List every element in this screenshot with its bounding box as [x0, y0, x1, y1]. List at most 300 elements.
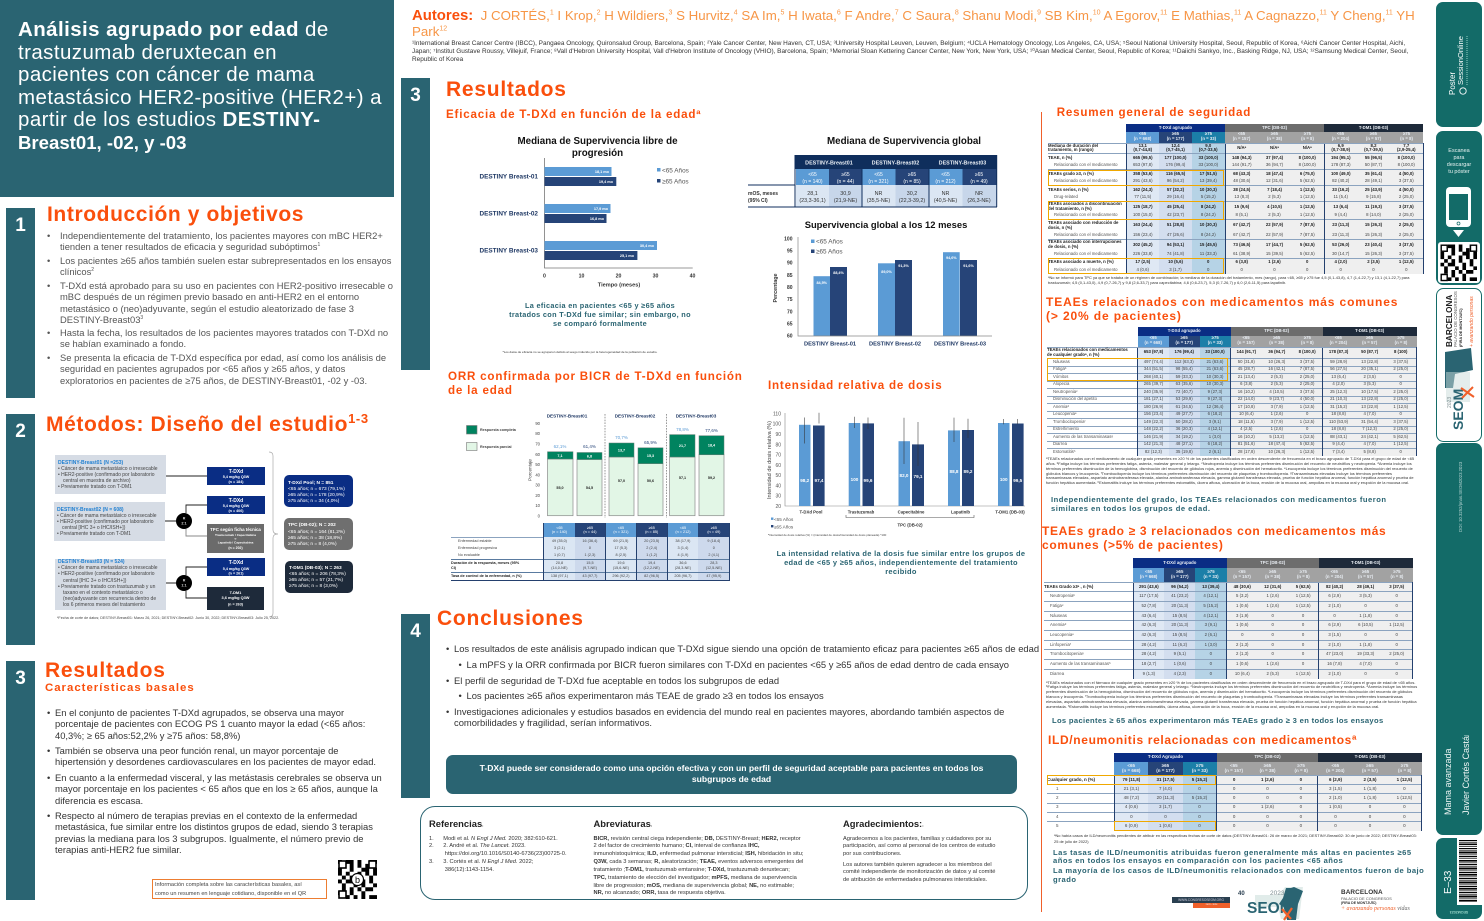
- table: resumen general de seguridad: 1 (12,5): [1300, 187, 1315, 192]
- patient box: DESTINY-Breast01: [55, 455, 166, 494]
- table: resumen general de seguridad: ≥75: [1205, 131, 1212, 136]
- table: resumen general de seguridad: TEAEs asociado con reducción de: [1048, 220, 1118, 225]
- table: resumen general de seguridad: 5 (62,5): [1300, 251, 1315, 256]
- table: TEAEs relacionados más comunes: 148 (22,2): [1144, 426, 1163, 431]
- table: resumen general de seguridad: 33 (16,2): [1332, 187, 1349, 192]
- table: TEAEs relacionados más comunes: 24 (42,1): [1361, 434, 1378, 439]
- table: TEAEs relacionados más comunes: 18 (8,8): [1331, 411, 1346, 416]
- table: mediana de SG: (35,5-NE): [867, 198, 890, 204]
- table: TEAEs relacionados más comunes: ≥65: [1181, 335, 1188, 340]
- header: poster title: Análisis agrupado por edad de: [18, 18, 329, 41]
- table: ILD neumonitis: 0: [1233, 786, 1235, 791]
- table: TEAEs relacionados más comunes: 240 (35,9): [1144, 389, 1163, 394]
- table: TEAEs relacionados más comunes: 9 (27,3): [1208, 389, 1222, 394]
- table: resumen general de seguridad: 47 (26,6): [1167, 232, 1184, 237]
- table: TEAEs relacionados más comunes: 5 (62,5): [1393, 434, 1408, 439]
- table: TEAEs relacionados más comunes: 10 (26,3): [1268, 359, 1285, 364]
- table: resumen general de seguridad: 28 (49,1): [1365, 178, 1382, 183]
- stacked bar chart: ORR: 54,5: [586, 486, 593, 490]
- takeaway: intensidad de dosis similar: La intensidad relativa de la dosis fue similar entre los grupos de: [777, 548, 1025, 558]
- table: ORR detail: 49 (35,0): [552, 539, 567, 543]
- table: TEAEs relacionados más comunes: <65: [1150, 335, 1157, 340]
- table: resumen general de seguridad: 2 (5,3): [1268, 212, 1281, 217]
- highlight: náuseas fatiga vómitos: [1047, 358, 1228, 381]
- highlight: cualquier grado: [1047, 775, 1216, 785]
- footnote: eficacia: ᵃLos datos de eficacia no se agruparon debido al sesgo inducido por la heterogeneidad de la población de estudio.: [503, 350, 657, 354]
- table: TEAEs relacionados más comunes: 16 (10,2): [1238, 434, 1255, 439]
- sidebar text: escanea para descargar: para: [1453, 155, 1464, 161]
- table: TEAEs relacionados más comunes: 3 (7,9): [1271, 419, 1283, 424]
- table: TEAEs relacionados más comunes: 7 (87,5): [1300, 366, 1314, 371]
- takeaway: eficacia similar: [509, 301, 691, 328]
- table: ORR detail: (n = 140): [552, 530, 567, 534]
- table: ILD neumonitis: 0: [1300, 814, 1302, 819]
- bar chart: mediana SLP: 18,1 mo: [595, 170, 610, 174]
- table: TEAEs relacionados más comunes: 10 (6,4): [1239, 411, 1254, 416]
- table: resumen general de seguridad: 2 (25,0): [1399, 222, 1414, 227]
- subheading: TEAEs más comunes: (> 20% de pacientes): [1046, 309, 1182, 323]
- table: TEAEs relacionados más comunes: 0: [1400, 411, 1402, 416]
- table: resumen general de seguridad: (0,7-33,5): [1199, 147, 1218, 152]
- table: TEAEs relacionados más comunes: 8 (100,0): [1299, 349, 1316, 354]
- table: TEAEs relacionados más comunes: 142 (21,3): [1144, 441, 1163, 446]
- table: ORR detail: (n = 49): [707, 530, 720, 534]
- table: TEAEs grado 3: 0: [1396, 642, 1398, 647]
- table: ILD neumonitis: 6 (2,9): [1329, 777, 1342, 782]
- table: resumen general de seguridad: 42 (23,7): [1167, 212, 1184, 217]
- table: resumen general de seguridad: 7 (87,5): [1300, 222, 1315, 227]
- bar chart: intensidad relativa de dosis: 80: [775, 442, 781, 448]
- text block: conclusiones bullets: Los pacientes ≥65 años experimentaron más TEAE de grado ≥3 en todos los ensayos: [466, 690, 824, 701]
- table: resumen general de seguridad: 177 (100,0): [1164, 155, 1186, 160]
- table: resumen general de seguridad: 8,2: [1370, 142, 1376, 148]
- bar chart: SG a 12 meses: <65 Años: [816, 238, 843, 246]
- table: TEAEs relacionados más comunes: 0: [1400, 374, 1402, 379]
- bar chart: SG a 12 meses: ≥65 Años: [816, 248, 843, 256]
- table: resumen general de seguridad: 50 (87,7): [1365, 162, 1382, 167]
- table: TEAEs relacionados más comunes: de cualquier gradoᵃ, n (%): [1047, 352, 1099, 357]
- table: TEAEs grado 3: 1 (2,6): [1266, 603, 1279, 608]
- text block: conclusiones bullets: Investigaciones adicionales y estudios basados en evidencia del mundo real en pacientes mayores, abordando también aspectos de: [454, 706, 1004, 717]
- table: ORR detail: ≥65: [711, 526, 717, 530]
- table: resumen general de seguridad: 2 (5,3): [1268, 194, 1281, 199]
- table: TEAEs grado 3: ≥65: [1269, 569, 1276, 574]
- abbreviations text: TPC, tratamiento de elección del investigador; mPFS, mediana de supervivencia: [594, 875, 797, 881]
- treatment box: T-DXd 03: [207, 558, 265, 576]
- table: mediana de SG: mOS, meses: [748, 191, 778, 197]
- treatment box: T-DXd 03: (n = 261): [228, 572, 244, 576]
- table: TEAEs relacionados más comunes: 18 (11,5): [1238, 419, 1255, 424]
- logo text: Barcelona: [1341, 889, 1410, 912]
- bar chart: intensidad relativa de dosis: 88,8: [950, 469, 959, 474]
- table: resumen general de seguridad: 17 (44,7): [1266, 242, 1283, 247]
- table: TEAEs relacionados más comunes: 5 (13,2): [1269, 434, 1284, 439]
- table: TEAEs relacionados más comunes: 3 (5,3): [1363, 381, 1376, 386]
- table: TEAEs relacionados más comunes: Estreñimiento: [1053, 426, 1079, 431]
- table: TEAEs relacionados más comunes: 2 (25,0): [1393, 396, 1408, 401]
- table: resumen general de seguridad: 125 (18,7): [1133, 204, 1153, 209]
- table: TEAEs relacionados más comunes: 22 (14,0): [1238, 396, 1255, 401]
- table: TEAEs relacionados más comunes: 4 (2,5): [1240, 426, 1252, 431]
- table: mediana de SG: <65: [874, 172, 883, 178]
- table: mediana de SG: <65: [941, 172, 950, 178]
- randomisation node 1:1: [176, 575, 192, 591]
- table: mediana de SG: 30,2: [907, 191, 917, 197]
- table: resumen general de seguridad: 100 (15,0): [1133, 212, 1153, 217]
- table: resumen general de seguridad: 653 (97,8): [1133, 162, 1153, 167]
- text block: introducción bullets: DESTINY-Breast033: [60, 315, 143, 325]
- bar chart: SG a 12 meses: [773, 236, 992, 348]
- table: ILD neumonitis: 0: [1233, 777, 1235, 782]
- table: mediana de SG: ≥65: [908, 172, 916, 178]
- table: ILD neumonitis: 0: [1198, 823, 1201, 828]
- text block: introducción bullets: [47, 231, 393, 386]
- treatment box: T-DXd 01: [207, 467, 265, 485]
- table: TEAEs grado 3: 0: [1241, 632, 1243, 637]
- table: TEAEs grado 3: 9 (1,3): [1143, 671, 1155, 676]
- table: TEAEs grado 3: 6 (10,5): [1358, 622, 1373, 627]
- text block: características basales bullets: mayor porcentaje en los pacientes < 65 años que en los ≥ 65 años, aunque la: [55, 784, 378, 794]
- bar chart: mediana SLP: DESTINY Breast-03: [480, 248, 538, 254]
- table: TEAEs grado 3: 3 (1,5): [1328, 632, 1341, 637]
- table: TEAEs grado 3: 15 (8,5): [1172, 613, 1187, 618]
- treatment box: TPC: Lapatinib / Capecitabina: [218, 540, 254, 544]
- text block: características basales bullets: diferencia es escasa.: [55, 796, 143, 806]
- table: mediana de SG: (n = 85): [903, 179, 921, 185]
- divider line: right column: [1041, 112, 1042, 912]
- table: TEAEs relacionados más comunes: 180 (26,9): [1144, 404, 1163, 409]
- pool box: TPC: ≥75 años; n = 8 (4,0%): [288, 541, 337, 547]
- bar chart: SG a 12 meses: 65: [787, 322, 793, 328]
- table: ILD neumonitis: (n = 668): [1122, 768, 1140, 773]
- stacked bar chart: ORR: 18,4: [708, 444, 716, 448]
- abbreviations text: libre de progression; mOS, mediana de supervivencia global; NE, no estimable;: [594, 883, 794, 889]
- table: resumen general de seguridad: 17 (51,5): [1200, 171, 1217, 176]
- table: ILD neumonitis: 0: [1403, 823, 1406, 828]
- treatment box: T-DXd 03: 5,4 mg/kg Q3W: [223, 567, 250, 571]
- table: ORR detail: <65: [556, 526, 563, 530]
- table: ILD neumonitis: 0: [1403, 804, 1406, 809]
- table: TEAEs relacionados más comunes: 0: [1400, 381, 1402, 386]
- table: TEAEs grado 3: 19 (33,3): [1357, 651, 1374, 656]
- table: resumen general de seguridad: 25 (43,9): [1365, 187, 1382, 192]
- table: mediana de SG: (22,3-39,2): [899, 198, 925, 204]
- patient box: DESTINY-Breast02: • Cáncer de mama metastásico o irresecable: [57, 513, 157, 519]
- pool box: T-DXd: ≥75 años; n = 34 (4,0%): [288, 498, 340, 504]
- table: TEAEs relacionados más comunes: 144 (91,7): [1237, 349, 1256, 354]
- table: ORR detail: 47 (95,9): [706, 574, 721, 578]
- table: TEAEs grado 3: 0: [1302, 651, 1304, 656]
- table: resumen general de seguridad: 156 (23,4): [1133, 232, 1153, 237]
- table: ILD neumonitis: 0: [1233, 804, 1235, 809]
- table: resumen general de seguridad: 4 (2,0): [1335, 259, 1347, 264]
- footnote: ILD: ᵃNo había casos de ILD/neumonitis pendientes de atribuir en las respectivas fechas de corte de datos (DESTINY-Breast01: 26 de marzo de 2021; DESTINY-Breast02: 30 de junio de 2022; DESTINY-Breast03: 25 de julio de 2022): [1054, 832, 1417, 844]
- treatment box: T-DM1: 3,6 mg/kg Q3W: [222, 595, 250, 600]
- stacked bar chart: ORR: 77,6%: [705, 428, 718, 433]
- patient box: DESTINY-Breast02: • HER2-positive (confirmado por laboratorio: [57, 519, 154, 525]
- table: ILD neumonitis: 1 (12,5): [1397, 795, 1412, 800]
- table: ILD neumonitis: Cualquier grado, n (%): [1047, 777, 1095, 782]
- bar chart: SG a 12 meses: 89,0%: [881, 270, 892, 274]
- sidebar panel: SEOM Barcelona: (FIRA DE MONTJUÏC): [1459, 308, 1463, 347]
- table: resumen general de seguridad: ≥65: [1271, 131, 1278, 136]
- subheading: ILD neumonitis: ILD/neumonitis relacionadas con medicamentosª: [1048, 733, 1357, 747]
- affiliations: ¹International Breast Cancer Centre (IBCC), Pangaea Oncology, Quironsalud Group, Barcelona, Spain; ²Yale Cancer Center, New Haven, CT, USA; ³University Hospital Leuven, Leuven, Belgium; ⁴UCLA Hematology Oncology, Los Angeles, CA, USA; ⁵Seoul National University Hospital, Seoul, Republic of Korea, ⁶Aichi Cancer Center Hospital, Aichi, Japan; ⁷Institut Gustave Roussy, Villejuif, France; ⁸Vall d'Hebron University Hospital, Vall d'Hebron Institute of Oncology (VHIO), Barcelona, Spain; ⁹Memorial Sloan Kettering Cancer Center, New York, New York, USA; ¹⁰Asan Medical Center, Seoul, Republic of Korea; ¹¹Daiichi Sankyo, Inc., Basking Ridge, NJ, USA; ¹²Samsung Medical Center, Seoul, Republic of Korea: [412, 40, 1408, 63]
- references list: [429, 836, 567, 873]
- table: TEAEs grado 3: 0: [1364, 603, 1367, 608]
- table: ILD neumonitis: ≥75: [1401, 763, 1408, 768]
- table: resumen general de seguridad: Drug-related: [1054, 194, 1078, 199]
- table: TEAEs relacionados más comunes: 50 (87,7): [1361, 349, 1378, 354]
- table: ILD neumonitis: T-DXd Agrupado: [1148, 754, 1183, 759]
- table: TEAEs relacionados más comunes: T-DXd agrupado: [1168, 328, 1201, 333]
- table: TEAEs relacionados más comunes: 82 (12,3): [1145, 449, 1162, 454]
- sidebar panel: Poster SessionOnline: [1436, 2, 1482, 127]
- table: resumen general de seguridad: 30 (14,7): [1332, 251, 1349, 256]
- table: TEAEs relacionados más comunes: 4 (12,1): [1208, 426, 1222, 431]
- table: TEAEs grado 3: 48 (30,6): [1234, 584, 1251, 589]
- table: ORR detail: ≥65: [587, 526, 593, 530]
- treatment box: T-DXd 01: (n = 184): [228, 480, 244, 484]
- table: ORR detail: 2 (4,1): [708, 553, 719, 557]
- subheading: TEAEs grado 3: TEAEs grado ≥ 3 relacionados con medicamentos más: [1042, 524, 1386, 538]
- table: mediana de SG: (40,5-NE): [934, 198, 957, 204]
- table: mediana de SG: DESTINY-Breast03: [939, 160, 986, 166]
- table: ORR detail: (n = 212): [675, 530, 690, 534]
- table: ORR detail: 138 (97,1): [551, 574, 568, 578]
- table: TEAEs grado 3: 0: [1396, 671, 1398, 676]
- table: TEAEs relacionados más comunes: 112 (63,3): [1175, 359, 1194, 364]
- table: resumen general de seguridad: 0: [1405, 267, 1407, 272]
- table: TEAEs grado 3: 52 (7,8): [1141, 603, 1156, 608]
- table: TEAEs relacionados más comunes: 1 (2,6): [1271, 426, 1283, 431]
- table: ORR detail: <65: [680, 526, 686, 530]
- takeaway: eficacia similar: La eficacia en pacientes <65 y ≥65 años: [525, 301, 675, 310]
- table: resumen general de seguridad: 22 (57,9): [1266, 222, 1283, 227]
- table: resumen general de seguridad: 1 (12,5): [1300, 212, 1315, 217]
- table: ILD neumonitis: 0: [1300, 777, 1302, 782]
- callout: información completa QR: Información completa sobre las características basales, así: [155, 882, 302, 888]
- table: TEAEs grado 3: 1 (12,5): [1296, 603, 1310, 608]
- table: TEAEs relacionados más comunes: 18 (8,8): [1331, 426, 1346, 431]
- subheading: ORR: ORR confirmada por BICR de T-DXd en función: [448, 370, 743, 383]
- table: TEAEs grado 3: ≥65: [1362, 569, 1369, 574]
- table: TEAEs grado 3: 0: [1396, 593, 1398, 598]
- chart title: supervivencia libre de progresión: [517, 136, 678, 158]
- bar chart: mediana SLP: [480, 158, 696, 288]
- table: TEAEs relacionados más comunes: ≥75: [1212, 335, 1219, 340]
- treatment box: TPC: [207, 524, 264, 553]
- table: resumen general de seguridad: 9 (15,8): [1366, 194, 1381, 199]
- table: TEAEs relacionados más comunes: 13 (22,8): [1361, 359, 1378, 364]
- table: TEAEs grado 3: 4 (12,1): [1203, 613, 1218, 618]
- panel: referencias, abreviaturas, agradecimientos: [420, 806, 1028, 900]
- table: resumen general de seguridad: T-DM1 (DB-03): [1359, 125, 1388, 130]
- treatment box: T-DXd 02: (n = 406): [228, 509, 244, 513]
- table: resumen general de seguridad: 35 (61,4): [1365, 171, 1382, 176]
- table: TEAEs relacionados más comunes: (n = 57): [1362, 340, 1377, 345]
- takeaway: TEAEs similares: Independientemente del grado, los TEAEs relacionados con medicamentos fueron: [1051, 495, 1386, 504]
- table: ILD neumonitis: <65: [1331, 763, 1339, 768]
- table: resumen general de seguridad: Mediana de duración del: [1048, 142, 1098, 148]
- table: ILD neumonitis: 0: [1266, 814, 1269, 819]
- table: TEAEs grado 3: 0: [1302, 613, 1304, 618]
- table: resumen general de seguridad: 4 (10,5): [1267, 204, 1282, 209]
- table: TEAEs relacionados más comunes: (n = 177): [1176, 340, 1193, 345]
- table: TEAEs grado 3: Neutropeniaᵇ: [1050, 593, 1075, 598]
- table: resumen general de seguridad: 15 (26,3): [1365, 222, 1382, 227]
- table: TEAEs relacionados más comunes: 156 (23,4): [1144, 411, 1163, 416]
- takeaway: ILD bullets: La mayoría de los casos de ILD/neumonitis relacionados con medicamentos fueron de bajo: [1053, 866, 1424, 875]
- table: ILD neumonitis: T-DM1 (DB-03): [1355, 754, 1385, 759]
- table: resumen general de seguridad: 3 (37,5): [1399, 178, 1414, 183]
- pool box: T-DM1: <65 años; n = 206 (78,3%): [289, 571, 346, 577]
- table: resumen general de seguridad: T-DXd agrupado: [1159, 125, 1192, 130]
- table: mediana de SG: (95% CI): [748, 198, 768, 204]
- table: resumen general de seguridad: 5 (62,5): [1300, 242, 1315, 247]
- table: resumen general de seguridad: 163 (24,4): [1133, 222, 1153, 227]
- table: TEAEs relacionados más comunes: 1 (12,5): [1393, 441, 1408, 446]
- table: resumen general de seguridad: (0,7-38,9): [1331, 147, 1350, 152]
- table: TEAEs relacionados más comunes: 1 (12,5): [1300, 434, 1314, 439]
- stacked bar chart: ORR: 65,9%: [644, 440, 657, 445]
- table: resumen general de seguridad: 358 (53,6): [1133, 171, 1153, 176]
- table: TEAEs grado 3: 0: [1210, 661, 1212, 666]
- table: resumen general de seguridad: TEAEs asociado con interrupciones: [1048, 239, 1122, 244]
- table: ILD neumonitis: (n = 204): [1326, 768, 1344, 773]
- table: TEAEs relacionados más comunes: Trombocitopeniaᶠ: [1053, 419, 1085, 424]
- table: ORR detail: Enfermedad estable: [458, 539, 492, 543]
- text block: introducción bullets: T-DXd está aprobado para su uso en pacientes con HER2-positivo irresecable o: [60, 281, 393, 291]
- sidebar panel: SEOM Barcelona: SEOM: [1450, 389, 1466, 430]
- table: ORR detail: 38 (17,9): [675, 539, 690, 543]
- text block: características basales bullets: hipertensión y desordenes cardiovasculares en los pacientes de mayor edad.: [55, 757, 376, 767]
- callout: conclusión principal: subgrupos de edad: [692, 774, 771, 784]
- table: resumen general de seguridad: (n = 8): [1400, 136, 1413, 141]
- bar chart: intensidad relativa de dosis: 20: [775, 504, 781, 510]
- text block: características basales bullets: En cuanto a la enfermedad visceral, y las metástasis cerebrales se observa un: [55, 773, 382, 783]
- text block: conclusiones bullets: El perfil de seguridad de T-DXd fue aceptable en todos los subgrupos de edad: [454, 675, 779, 686]
- icon: QR code baseline: b: [355, 875, 360, 885]
- table: TEAEs grado 3: 18 (2,7): [1141, 661, 1156, 666]
- table: resumen general de seguridad: 176 (99,4): [1166, 162, 1185, 167]
- table: TEAEs relacionados más comunes: 34 (19,2): [1176, 434, 1193, 439]
- table: resumen general de seguridad: 8 (14,0): [1366, 212, 1381, 217]
- table: TEAEs relacionados más comunes: 31 (15,2): [1330, 404, 1347, 409]
- table: ORR detail: 69 (21,5): [613, 539, 628, 543]
- table: TEAEs grado 3: 0: [1272, 651, 1274, 656]
- table: ILD neumonitis: <65: [1127, 763, 1135, 768]
- header: poster title: pacientes con cáncer de mama: [18, 63, 315, 86]
- table: resumen general de seguridad: 45 (25,4): [1167, 204, 1184, 209]
- references list: 1. Modi et al. N Engl J Med. 2020; 382:610-621.: [429, 836, 558, 842]
- table: ILD neumonitis: 0: [1130, 814, 1133, 819]
- text block: introducción bullets: exploratorios en pacientes de ≥75 años, de DESTINY-Breast01, -02 y -03.: [60, 376, 367, 386]
- table: TEAEs relacionados más comunes: 6 (3,8): [1240, 381, 1252, 386]
- bar chart: intensidad relativa de dosis: ≥65 Años: [774, 524, 794, 530]
- table: mediana de SG: ≥65: [841, 172, 850, 178]
- pool box: T-DXd: [284, 475, 353, 507]
- bar chart: SG a 12 meses: 91,6%: [963, 264, 974, 268]
- table: resumen general de seguridad: 9,0: [1205, 142, 1211, 148]
- table: resumen general de seguridad: 9 (4,4): [1335, 212, 1347, 217]
- table: ORR detail: 15,5: [586, 561, 594, 565]
- treatment box: T-DXd 03: T-DXd: [229, 560, 243, 566]
- table: TEAEs relacionados más comunes: Estomatitisʰ: [1053, 449, 1075, 454]
- table: resumen general de seguridad: 23 (11,3): [1332, 232, 1349, 237]
- bar chart: mediana SLP: 19,4 mo: [599, 180, 614, 184]
- table: TEAEs grado 3: 1 (3,0): [1205, 642, 1217, 647]
- acknowledgements text: participación, así como al personal de los centros de estudio: [843, 843, 995, 849]
- table: mediana de SG: DESTINY-Breast02: [872, 160, 919, 166]
- bar chart: SG a 12 meses: 75: [787, 297, 793, 303]
- table: ORR detail: Tasa de control de la enfermedad, n (%): [451, 574, 522, 578]
- bar chart: mediana SLP: 17,9 mo: [594, 207, 609, 211]
- table: resumen general de seguridad: 15 (26,3): [1365, 251, 1382, 256]
- table: resumen general de seguridad: 77 (11,5): [1134, 194, 1151, 199]
- text block: características basales bullets: [47, 708, 382, 855]
- table: resumen general de seguridad: 1 (2,6): [1268, 259, 1281, 264]
- table: mediana de SG: (26,3-NE): [967, 198, 991, 204]
- table: TEAEs relacionados más comunes: 3 (9,1): [1209, 419, 1221, 424]
- table: resumen general de seguridad: 68 (43,3): [1233, 171, 1250, 176]
- takeaway: ILD bullets: años en todos los ensayos en comparación con los pacientes <65 años: [1053, 856, 1343, 865]
- bar chart: intensidad relativa de dosis: 30: [775, 494, 781, 500]
- table: resumen general de seguridad: 94 (53,1): [1167, 242, 1184, 247]
- treatment box: T-DM1: T-DM1: [230, 590, 242, 595]
- table: resumen general de seguridad: [1048, 124, 1424, 274]
- heading: referencias: Referencias:: [429, 818, 484, 829]
- bar chart: mediana SLP: Tiempo (meses): [598, 282, 640, 288]
- logo text: Barcelona: BARCELONA: [1341, 889, 1383, 896]
- sidebar text: escanea para descargar: [1447, 148, 1472, 175]
- sidebar panel: escanea: [1436, 131, 1482, 285]
- chart title: supervivencia libre de progresión: Mediana de Supervivencia libre de: [517, 136, 678, 147]
- table: TEAEs grado 3: 47 (23,0): [1326, 651, 1343, 656]
- table: resumen general de seguridad: 1 (12,5): [1399, 259, 1414, 264]
- authors: Autores: J CORTÉS,1 I Krop,2 H Wildiers,3 S Hurvitz,4 SA Im,5 H Iwata,6 F Andre,7 C Saura,8 Shanu Modi,9 SB Kim,10 A Egorov,11 E Mathias,11 A Cagnazzo,11 Y Cheng,11 YH: [412, 8, 1415, 24]
- table: TEAEs grado 3: 42 (6,3): [1141, 632, 1156, 637]
- abbreviations text: [594, 836, 803, 896]
- table: ORR detail: (14,0-NE): [551, 566, 568, 570]
- table: TEAEs relacionados más comunes: 53 (29,9): [1176, 396, 1193, 401]
- pool box: T-DXd: ≥65 años; n = 178 (20,9%): [288, 492, 345, 498]
- bar chart: mediana SLP: 0: [543, 274, 546, 280]
- table: resumen general de seguridad: <65: [1337, 131, 1344, 136]
- sidebar panel: SEOM Barcelona: BARCELONA: [1445, 295, 1454, 347]
- table: TEAEs relacionados más comunes: 268 (40,1): [1144, 374, 1163, 379]
- text block: características basales bullets: terapias anti-HER2 fue similar.: [55, 845, 182, 855]
- bar chart: intensidad relativa de dosis: 90: [775, 432, 781, 438]
- takeaway: TEAEs similares: similares en todos los grupos de edad.: [1051, 504, 1211, 513]
- table: resumen general de seguridad: 8 (100,0): [1398, 162, 1415, 167]
- logo: congress website: 2023 - 2024: [1206, 904, 1217, 906]
- text block: conclusiones bullets: comorbilidades y fragilidad, serían informativos.: [454, 717, 652, 728]
- stacked bar chart: ORR: 80: [535, 431, 541, 436]
- table: resumen general de seguridad: 12,4: [1171, 142, 1180, 148]
- table: resumen general de seguridad: 17 (2,5): [1135, 259, 1150, 264]
- references list: 386(12):1143-1154.: [445, 867, 494, 873]
- table: TEAEs relacionados más comunes: ≥75: [1304, 335, 1311, 340]
- table: ILD neumonitis: 1 (1,8): [1363, 795, 1376, 800]
- table: TEAEs relacionados más comunes: <65: [1335, 335, 1342, 340]
- table: ORR detail: CI): [451, 566, 456, 570]
- table: TEAEs grado 3: 0: [1210, 651, 1212, 656]
- table: TEAEs grado 3: 0: [1396, 632, 1398, 637]
- table: TEAEs grado 3: 0: [1302, 622, 1304, 627]
- table: TEAEs grado 3: 2 (1,0): [1328, 642, 1341, 647]
- table: resumen general de seguridad: 74 (41,8): [1167, 251, 1184, 256]
